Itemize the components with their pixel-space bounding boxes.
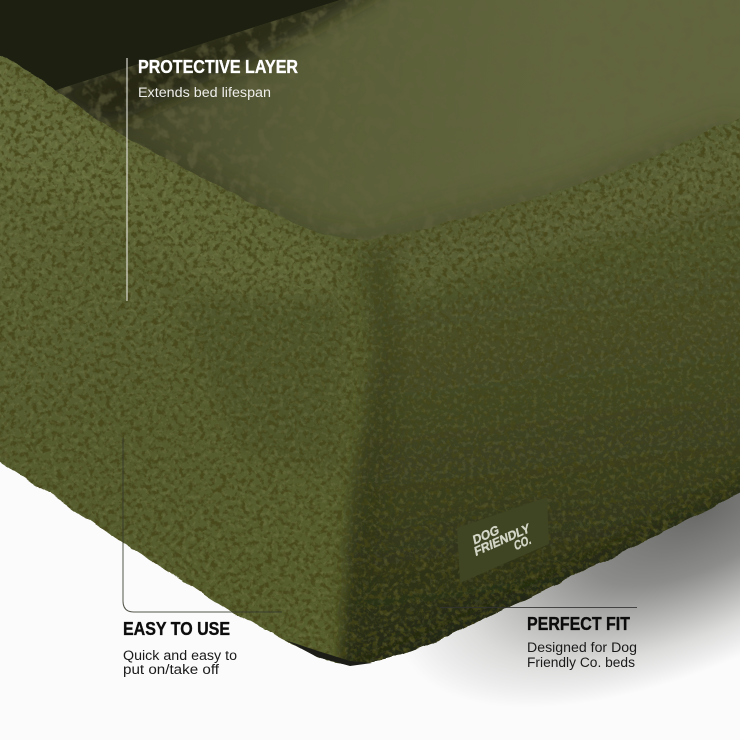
subtext: easy to use: Quick and easy to	[123, 648, 237, 663]
subtext: perfect fit	[527, 640, 637, 670]
subtext: easy to use	[123, 648, 237, 677]
dark bed base edge	[285, 640, 372, 666]
label text: Dog Friendly Co.: CO.	[513, 532, 532, 553]
bed seat cushion	[55, 0, 740, 240]
right side wall of bed	[332, 208, 740, 664]
heading: easy to use: EASY TO USE	[123, 619, 230, 639]
label text: Dog Friendly Co.: DOG	[472, 522, 500, 548]
callout: protective layer	[127, 57, 298, 301]
label text: Dog Friendly Co.	[471, 510, 534, 570]
callout: easy to use	[123, 438, 282, 677]
leader line: protective layer	[126, 58, 128, 301]
subtext: perfect fit: Friendly Co. beds	[527, 655, 635, 670]
subtext: easy to use: put on/take off	[123, 662, 219, 677]
brand label patch	[457, 497, 549, 583]
subtext: perfect fit: Designed for Dog	[527, 640, 637, 655]
callout: perfect fit	[440, 608, 637, 670]
heading: perfect fit: PERFECT FIT	[527, 614, 630, 634]
label text: Dog Friendly Co.: FRIENDLY	[473, 521, 531, 559]
back wall in shadow	[0, 0, 345, 170]
leader line: easy to use	[123, 438, 282, 612]
heading: protective layer: PROTECTIVE LAYER	[138, 57, 298, 77]
leader line: perfect fit	[440, 606, 637, 608]
subtext: protective layer: Extends bed lifespan	[138, 85, 271, 100]
